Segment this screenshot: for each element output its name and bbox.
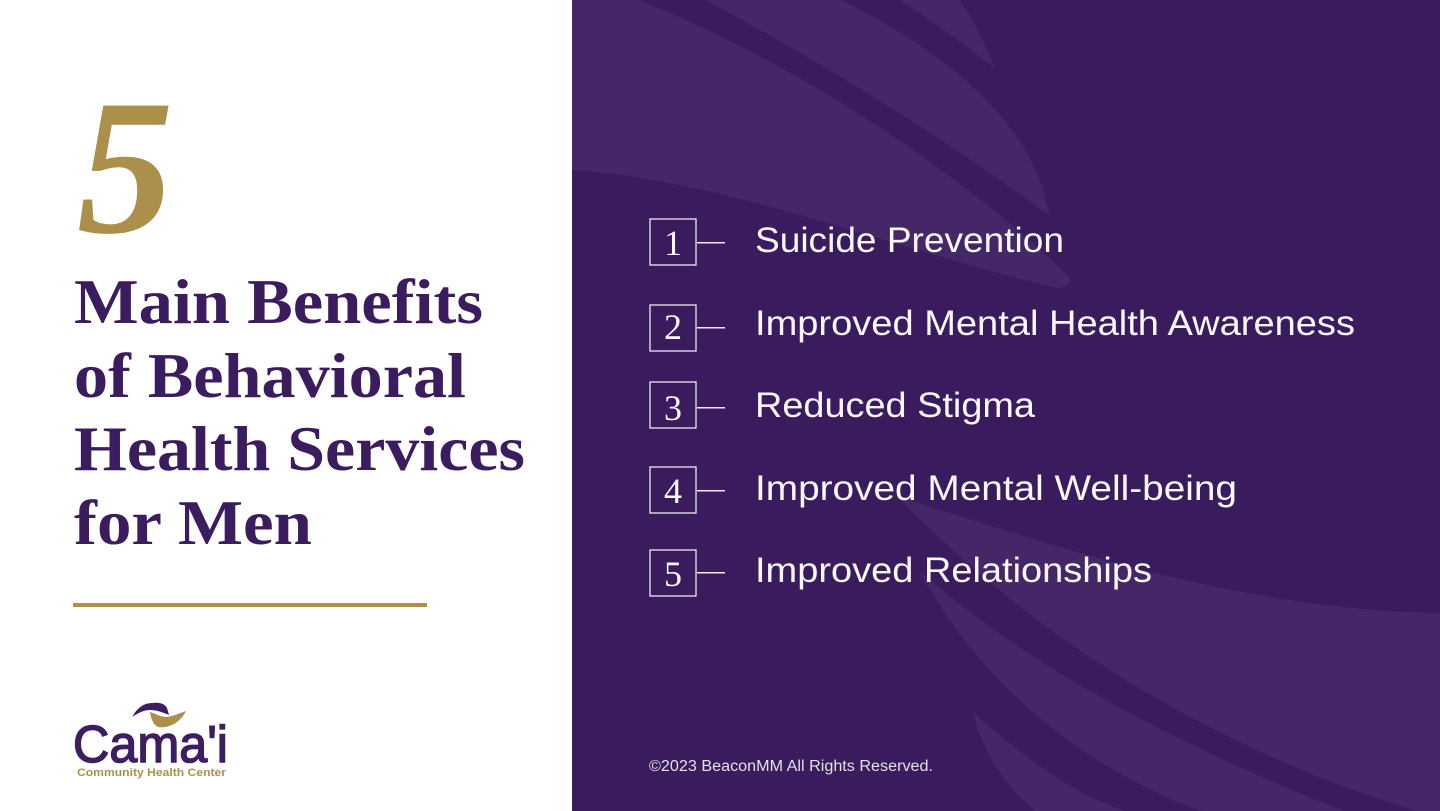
copyright: ©2023 BeaconMM All Rights Reserved. bbox=[649, 758, 933, 775]
list item 1 bbox=[650, 219, 1064, 265]
logo bbox=[73, 703, 228, 779]
title: of Behavioral bbox=[74, 341, 466, 411]
logo tagline: Community Health Center bbox=[77, 767, 227, 779]
title: Main Benefits bbox=[74, 267, 483, 337]
list item 4 bbox=[650, 467, 1237, 513]
list item 1: 1 bbox=[664, 223, 682, 263]
list item 2: 2 bbox=[664, 307, 682, 347]
list item 2 bbox=[650, 304, 1355, 351]
list item 3 bbox=[650, 382, 1036, 428]
panel: left white bbox=[0, 0, 572, 811]
icon: logo swoosh bbox=[132, 703, 186, 727]
title: for Men bbox=[74, 488, 312, 558]
list item 3: Reduced Stigma bbox=[755, 386, 1036, 425]
list item 2: Improved Mental Health Awareness bbox=[755, 304, 1355, 343]
list item 5 bbox=[650, 550, 1152, 596]
list item 4: 4 bbox=[664, 471, 682, 511]
panel: right purple bbox=[572, 0, 1440, 811]
title bbox=[74, 267, 525, 558]
list item 1: Suicide Prevention bbox=[755, 221, 1064, 260]
logo wordmark: Cama'i bbox=[73, 716, 228, 774]
list item 5: Improved Relationships bbox=[755, 551, 1152, 590]
list item 5: 5 bbox=[664, 554, 682, 594]
big number 5: 5 bbox=[77, 60, 174, 274]
title: Health Services bbox=[74, 414, 525, 484]
list item 3: 3 bbox=[664, 388, 682, 428]
list item 4: Improved Mental Well-being bbox=[755, 469, 1237, 508]
gold divider bbox=[73, 603, 427, 607]
